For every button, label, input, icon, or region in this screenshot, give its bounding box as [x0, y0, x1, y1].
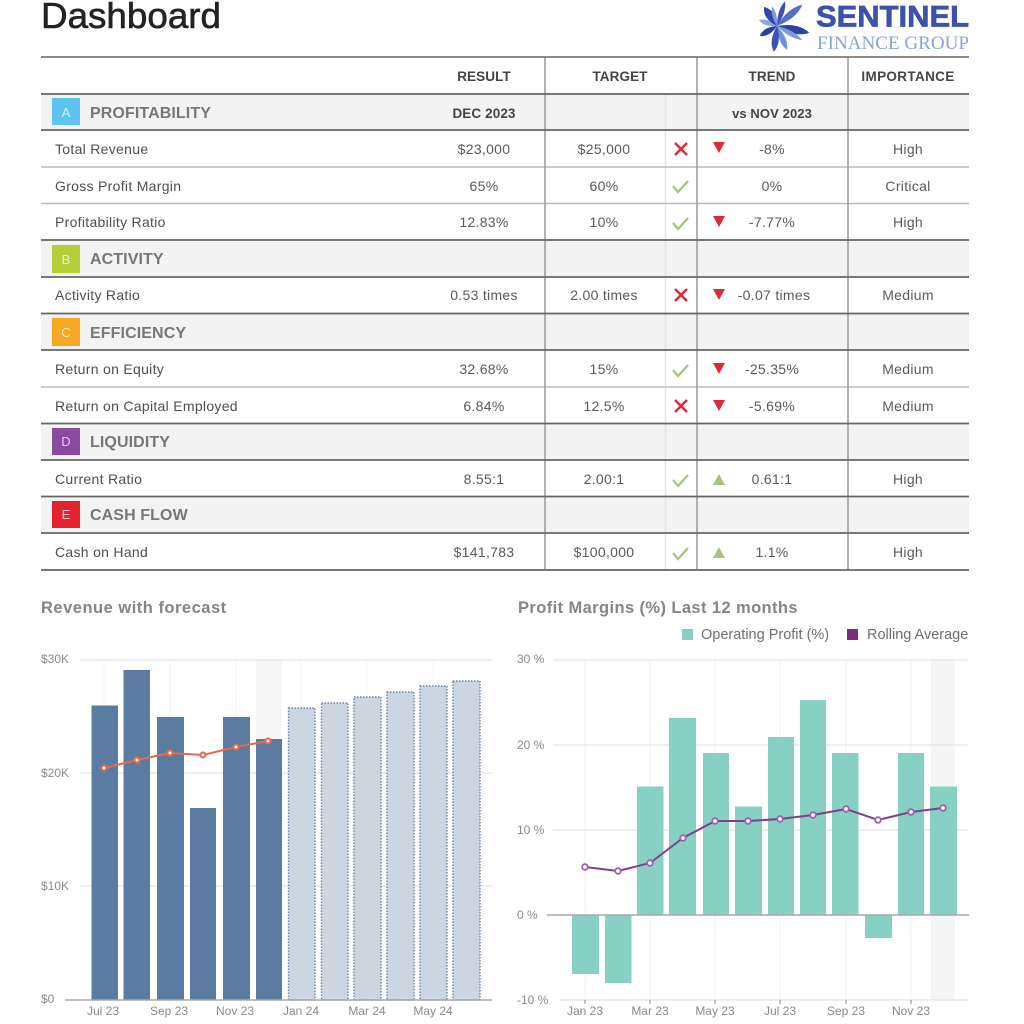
- y axis labels: -10 %: [517, 993, 549, 1007]
- highlight band: [256, 660, 282, 1000]
- section D: liquidity: LIQUIDITY: [90, 434, 170, 451]
- row: cash on hand: [55, 544, 923, 560]
- section E: cash flow: [52, 501, 189, 528]
- section A: profitability: A: [62, 105, 71, 120]
- row: cash on hand: Cash on Hand: [55, 544, 148, 560]
- row: profitability ratio: [55, 214, 923, 230]
- rolling average line: [582, 805, 946, 874]
- y axis labels: $10K: [41, 879, 69, 893]
- row: current ratio: [55, 471, 923, 487]
- row: return on capital employed: Return on Capital Employed: [55, 398, 238, 414]
- row: return on capital employed: [55, 398, 934, 414]
- section E: cash flow: CASH FLOW: [90, 507, 189, 524]
- logo: Sentinel Finance Group: [758, 0, 969, 54]
- table header: TREND: [748, 69, 796, 84]
- row: profitability ratio: Profitability Ratio: [55, 214, 166, 230]
- y axis labels: 10 %: [517, 823, 545, 837]
- section B: activity: [52, 245, 164, 273]
- row: current ratio: High: [893, 471, 923, 487]
- legend: [682, 627, 968, 643]
- operating profit bars: [572, 700, 957, 983]
- row: profitability ratio: 12.83%: [459, 214, 509, 230]
- section B: activity: B: [62, 252, 70, 267]
- row: return on equity: -25.35%: [745, 361, 799, 377]
- row: cash on hand: High: [893, 544, 923, 560]
- y axis labels: [517, 652, 549, 1007]
- table header: TARGET: [592, 69, 648, 84]
- table header: [457, 69, 955, 84]
- row: activity ratio: -0.07 times: [738, 287, 810, 303]
- x axis labels: Mar 24: [348, 1004, 386, 1018]
- y axis labels: $20K: [41, 766, 69, 780]
- row: activity ratio: 2.00 times: [570, 287, 638, 303]
- row: gross profit margin: Gross Profit Margin: [55, 178, 181, 194]
- section D: liquidity: [52, 428, 170, 455]
- row: total revenue: $25,000: [578, 141, 630, 157]
- x axis labels: Jan 24: [283, 1004, 319, 1018]
- section bands: [41, 94, 969, 533]
- row: total revenue: [55, 141, 923, 157]
- section A: profitability: PROFITABILITY: [90, 105, 211, 122]
- legend: Rolling Average: [867, 627, 968, 643]
- row: profitability ratio: High: [893, 214, 923, 230]
- x axis labels: Nov 23: [892, 1004, 930, 1018]
- actual revenue bars: [92, 670, 282, 1000]
- legend: Operating Profit (%): [701, 627, 829, 643]
- row: gross profit margin: Critical: [885, 178, 931, 194]
- row: gross profit margin: 0%: [762, 178, 782, 194]
- section D: liquidity: D: [61, 434, 71, 449]
- row: profitability ratio: 10%: [590, 214, 618, 230]
- chart: profit margins: [517, 599, 969, 1018]
- section A: profitability: DEC 2023: [452, 106, 516, 121]
- row: gross profit margin: 60%: [590, 178, 618, 194]
- row: return on equity: 15%: [590, 361, 618, 377]
- row: return on capital employed: Medium: [882, 398, 934, 414]
- section A: profitability: vs NOV 2023: [732, 106, 812, 121]
- section C: efficiency: C: [61, 325, 71, 340]
- section C: efficiency: EFFICIENCY: [90, 325, 186, 342]
- x axis labels: May 23: [695, 1004, 735, 1018]
- row: return on equity: [55, 361, 934, 377]
- table: [41, 57, 969, 570]
- row: gross profit margin: [55, 178, 931, 194]
- section B: activity: ACTIVITY: [90, 251, 164, 268]
- x axis labels: Jul 23: [764, 1004, 796, 1018]
- row: return on equity: 32.68%: [459, 361, 509, 377]
- row: current ratio: 8.55:1: [464, 471, 504, 487]
- row: total revenue: Total Revenue: [55, 141, 148, 157]
- icon: blue starburst: [758, 0, 810, 52]
- row: total revenue: -8%: [759, 141, 785, 157]
- y axis labels: [41, 652, 69, 1006]
- y axis labels: $30K: [41, 652, 69, 666]
- x axis labels: Nov 23: [216, 1004, 254, 1018]
- y axis labels: 0 %: [517, 908, 538, 922]
- row: current ratio: 0.61:1: [752, 471, 792, 487]
- chart title: Revenue with forecast: [41, 599, 227, 617]
- y axis labels: $0: [41, 992, 55, 1006]
- row: activity ratio: 0.53 times: [450, 287, 518, 303]
- row: return on equity: Medium: [882, 361, 934, 377]
- y axis labels: 20 %: [517, 738, 545, 752]
- row: activity ratio: Activity Ratio: [55, 287, 140, 303]
- row: gross profit margin: 65%: [470, 178, 498, 194]
- x axis labels: [567, 1004, 930, 1018]
- table header: RESULT: [457, 69, 511, 84]
- y axis labels: 30 %: [517, 652, 545, 666]
- row: profitability ratio: -7.77%: [749, 214, 795, 230]
- logo subtitle: FINANCE GROUP: [817, 33, 969, 54]
- x axis labels: Jan 23: [567, 1004, 603, 1018]
- chart title: Profit Margins (%) Last 12 months: [518, 599, 798, 617]
- section C: efficiency: [52, 318, 186, 346]
- row: cash on hand: $100,000: [574, 544, 634, 560]
- row: return on equity: Return on Equity: [55, 361, 164, 377]
- row: return on capital employed: -5.69%: [749, 398, 795, 414]
- row: total revenue: High: [893, 141, 923, 157]
- x axis labels: Jul 23: [87, 1004, 119, 1018]
- x axis labels: Sep 23: [150, 1004, 188, 1018]
- row: return on capital employed: 12.5%: [583, 398, 625, 414]
- x axis labels: [87, 1004, 453, 1018]
- row: activity ratio: Medium: [882, 287, 934, 303]
- row: current ratio: 2.00:1: [584, 471, 624, 487]
- section E: cash flow: E: [62, 507, 71, 522]
- x axis labels: May 24: [413, 1004, 453, 1018]
- x axis labels: Sep 23: [827, 1004, 865, 1018]
- table header: IMPORTANCE: [861, 69, 955, 84]
- forecast bars: [288, 681, 480, 1000]
- row: cash on hand: $141,783: [454, 544, 514, 560]
- chart: revenue with forecast: [41, 599, 492, 1018]
- x axis labels: Mar 23: [631, 1004, 669, 1018]
- row: activity ratio: [55, 287, 934, 303]
- logo name: SENTINEL: [816, 0, 969, 34]
- row: current ratio: Current Ratio: [55, 471, 142, 487]
- row: return on capital employed: 6.84%: [463, 398, 505, 414]
- row: total revenue: $23,000: [458, 141, 510, 157]
- row: cash on hand: 1.1%: [755, 544, 789, 560]
- rolling line: [102, 738, 270, 770]
- highlight band: [931, 660, 955, 1000]
- section A: profitability: [52, 98, 812, 125]
